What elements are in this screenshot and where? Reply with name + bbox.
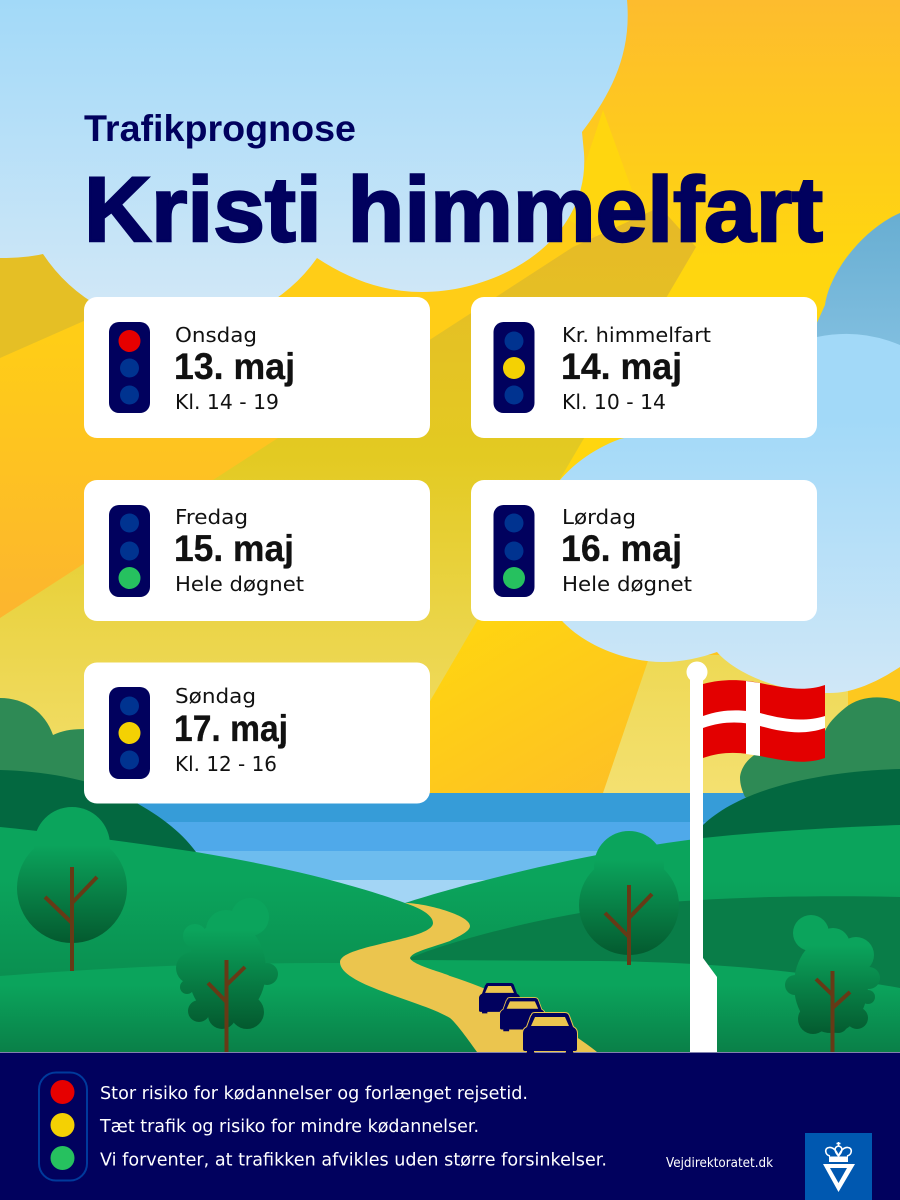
traffic light: yellow <box>494 322 534 413</box>
card: Søndag 17. maj: 17. maj <box>174 708 288 749</box>
title: Kristi himmelfart <box>84 159 823 261</box>
Danish flag <box>703 680 825 762</box>
tree 4 <box>785 915 880 1052</box>
car 2 <box>500 998 545 1031</box>
traffic light: red <box>109 322 150 413</box>
landscape hills <box>0 697 900 1052</box>
traffic light: green <box>494 505 534 597</box>
traffic light: yellow <box>109 687 150 779</box>
car 1 <box>479 983 520 1013</box>
card: Onsdag 13. maj: Onsdag <box>175 323 257 347</box>
card: Kr. himmelfart 14. maj: Kr. himmelfart <box>562 323 711 347</box>
card: Onsdag 13. maj: Kl. 14 - 19 <box>175 390 279 414</box>
card: Lørdag 16. maj <box>471 480 817 621</box>
tree 3 <box>579 831 679 965</box>
card: Fredag 15. maj: Fredag <box>175 505 248 529</box>
background: sun rays <box>0 0 900 800</box>
tree 1 <box>17 807 127 971</box>
card: Søndag 17. maj: Kl. 12 - 16 <box>175 752 277 776</box>
card: Lørdag 16. maj: Hele døgnet <box>562 572 692 596</box>
top cloud <box>0 0 628 328</box>
cars <box>479 983 577 1053</box>
card: Kr. himmelfart 14. maj: 14. maj <box>561 346 682 387</box>
card: Søndag 17. maj <box>84 662 430 804</box>
legend traffic light <box>39 1072 87 1180</box>
card: Søndag 17. maj: Søndag <box>175 684 256 708</box>
sea <box>0 793 900 930</box>
flagpole <box>686 662 717 1053</box>
card: Lørdag 16. maj: Lørdag <box>562 505 636 529</box>
card: Fredag 15. maj: 15. maj <box>174 528 294 569</box>
legend text: red: Stor risiko for kødannelser og forlænget rejsetid. <box>100 1084 528 1104</box>
road <box>340 903 597 1052</box>
legend text: green: Vi forventer, at trafikken afvikles uden større forsinkelser. <box>100 1150 607 1170</box>
card: Fredag 15. maj: Hele døgnet <box>175 572 304 596</box>
logo <box>805 1133 872 1200</box>
legend text: yellow: Tæt trafik og risiko for mindre kødannelser. <box>99 1117 479 1137</box>
card: Lørdag 16. maj: 16. maj <box>561 528 682 569</box>
footer legend band <box>0 1052 900 1200</box>
card: Kr. himmelfart 14. maj <box>471 297 817 438</box>
card: Fredag 15. maj <box>84 480 430 621</box>
right cloud <box>542 334 900 693</box>
card: Onsdag 13. maj: 13. maj <box>174 346 295 387</box>
website: Vejdirektoratet.dk <box>666 1156 773 1171</box>
card: Onsdag 13. maj <box>84 297 430 438</box>
car 3 <box>523 1013 577 1053</box>
subtitle: Trafikprognose <box>84 108 356 149</box>
traffic light: green <box>109 505 150 597</box>
card: Kr. himmelfart 14. maj: Kl. 10 - 14 <box>562 390 666 414</box>
back cloud right <box>800 213 900 360</box>
tree 2 <box>176 898 278 1052</box>
